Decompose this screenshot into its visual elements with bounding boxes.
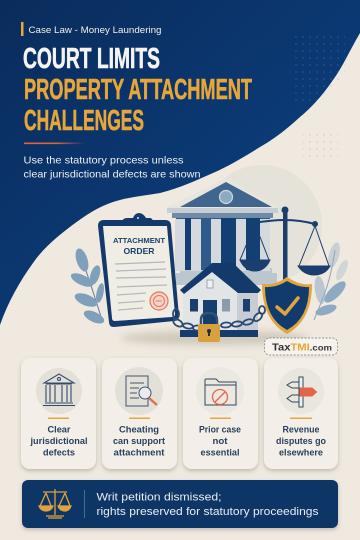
attachment order heading: ORDER — [124, 246, 154, 256]
panel: clear jurisdictional defects — [21, 358, 96, 469]
banner text: Writ petition dismissed; — [96, 492, 222, 504]
card text: disputes go — [276, 436, 326, 447]
watermark badge: TaxTMI.com — [272, 342, 332, 354]
ground shadow — [120, 331, 310, 345]
card text: defects — [43, 448, 75, 458]
attachment order heading: ATTACHMENT — [113, 236, 165, 245]
icon: chain — [172, 306, 265, 330]
icon: gold scales — [39, 489, 71, 518]
card text: elsewhere — [279, 448, 323, 458]
icon: courthouse outline — [43, 374, 75, 406]
banner text: rights preserved for statutory proceedings — [96, 506, 319, 518]
panel: cheating can support attachment — [102, 358, 177, 469]
icon: signpost — [287, 377, 316, 407]
dot texture — [295, 33, 345, 160]
panel: revenue disputes go elsewhere — [264, 358, 338, 469]
card text: attachment — [114, 448, 165, 458]
title: CHALLENGES — [24, 105, 144, 137]
subtitle: Use the statutory process unless — [24, 154, 184, 166]
card text: Cheating — [119, 424, 159, 436]
card text: Clear — [48, 424, 71, 436]
card text: can support — [113, 436, 166, 447]
title — [23, 43, 252, 137]
icon: padlock — [198, 313, 220, 342]
accent rule — [24, 142, 85, 144]
icon: left leaves — [69, 247, 106, 326]
subtitle — [24, 154, 201, 180]
card text: jurisdictional — [30, 436, 87, 447]
card text: Prior case — [199, 424, 241, 436]
icon: folder with prohibition sign — [205, 379, 236, 405]
watermark badge — [264, 338, 338, 355]
icon: scales of justice — [240, 207, 330, 310]
card text — [113, 424, 166, 458]
attachment order heading — [113, 236, 165, 256]
icon: document with magnifier — [126, 376, 157, 406]
steps — [176, 268, 277, 285]
card text — [199, 424, 241, 458]
navy curved header panel — [0, 0, 360, 325]
icon: house — [180, 263, 261, 337]
eyebrow label: Case Law - Money Laundering — [28, 25, 162, 36]
banner: conclusion — [22, 480, 338, 528]
card text — [276, 424, 326, 458]
card text: essential — [200, 448, 240, 458]
banner text — [96, 492, 319, 518]
icon: right leaves — [313, 241, 350, 320]
icon: clipboard attachment order — [98, 213, 179, 327]
illustration backdrop circle — [202, 165, 322, 285]
card text — [30, 424, 87, 458]
icon: courthouse — [166, 178, 280, 285]
panel: prior case not essential — [183, 358, 258, 469]
subtitle: clear jurisdictional defects are shown — [24, 168, 201, 180]
card text: not — [212, 436, 228, 447]
title: COURT LIMITS — [23, 43, 160, 75]
icon: shield with check — [262, 277, 312, 334]
card text: Revenue — [282, 424, 320, 436]
